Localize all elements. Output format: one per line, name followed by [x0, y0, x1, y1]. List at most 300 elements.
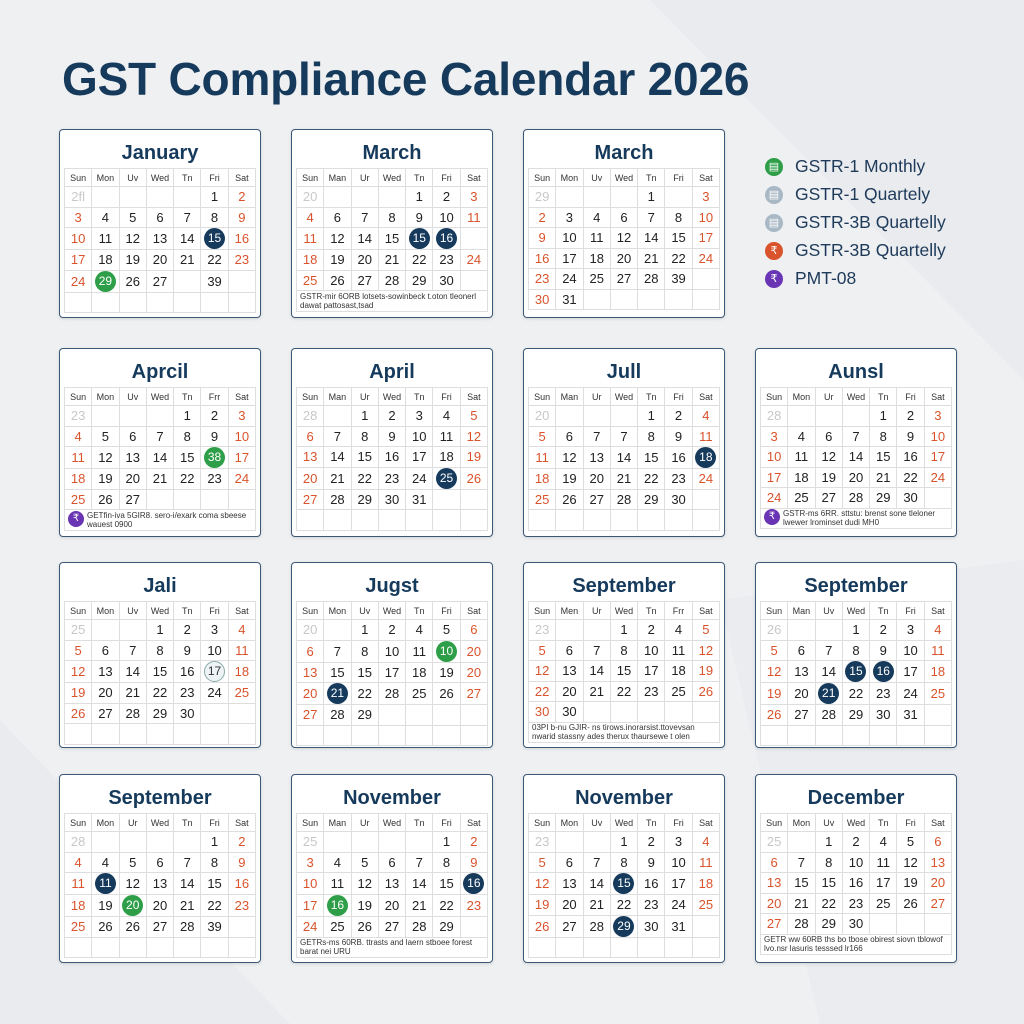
calendar: December: 25 — [767, 834, 781, 849]
calendar: Aprcil: ₹ — [73, 513, 79, 524]
calendar: September 2: Sat — [931, 606, 945, 616]
calendar: April: 4 — [443, 408, 450, 423]
calendar: Jali: 22 — [153, 685, 167, 700]
calendar: Jali: 23 — [180, 685, 194, 700]
calendar: Aunsl: 14 — [849, 449, 863, 464]
calendar: January: 4 — [102, 210, 109, 225]
calendar: Jull: 11 — [699, 429, 713, 444]
calendar: January: 24 — [71, 274, 85, 288]
calendar: Jugst: 1 — [361, 622, 368, 637]
calendar: Jull: 23 — [671, 471, 686, 486]
calendar: January: 2fl — [71, 189, 85, 204]
calendar: September: Sat — [699, 606, 713, 616]
calendar: March: Fri — [441, 172, 452, 182]
calendar: September: 8 — [620, 643, 628, 658]
calendar: Jugst: 6 — [307, 644, 314, 658]
calendar: Jugst: 5 — [443, 622, 450, 637]
calendar: Jali: Tn — [182, 606, 193, 616]
calendar: March: 9 — [416, 210, 423, 225]
calendar: Jali: 21 — [125, 685, 140, 700]
calendar: Aunsl: 10 — [931, 429, 945, 444]
calendar: December: 26 — [903, 896, 918, 911]
calendar: Jull: 8 — [648, 429, 655, 444]
calendar: Jugst: Fri — [441, 606, 452, 616]
calendar: September 3: 8 — [211, 855, 218, 870]
calendar: March: 8 — [388, 210, 396, 225]
calendar: November 2: November — [575, 787, 673, 809]
calendar: September 2: 7 — [825, 643, 832, 658]
calendar: March 2: 3 — [566, 210, 573, 225]
calendar: September 2: 26 — [767, 622, 781, 637]
calendar: Aunsl: 17 — [931, 449, 945, 464]
calendar: September: 26 — [699, 684, 713, 699]
calendar: April: 12 — [467, 429, 481, 444]
calendar: Aprcil: 20 — [125, 471, 140, 486]
calendar: March: Wed — [383, 172, 401, 182]
calendar: March: 19 — [330, 252, 345, 267]
calendar: November: 9 — [470, 855, 477, 870]
calendar: Jull: Sun — [534, 392, 550, 402]
calendar: Jali: 2 — [184, 622, 191, 637]
calendar: Jull: 29 — [644, 492, 658, 507]
calendar: January: 20 — [153, 252, 167, 267]
calendar: April: 26 — [467, 470, 481, 486]
calendar: Jugst: 7 — [334, 644, 341, 658]
calendar: November 2: 1 — [620, 834, 628, 849]
calendar: April: 15 — [357, 449, 372, 464]
calendar: September: 23 — [535, 622, 549, 637]
calendar: December: 21 — [794, 896, 809, 911]
calendar: September: 15 — [617, 663, 631, 678]
calendar: December: 25 — [876, 896, 890, 911]
calendar: January: 3 — [75, 210, 82, 225]
calendar: Aunsl: 17 — [767, 470, 781, 485]
calendar: Jull: 18 — [699, 450, 713, 464]
calendar: September 3: 2 — [238, 834, 245, 849]
calendar: Jugst: 15 — [357, 665, 372, 680]
calendar: December: 27 — [931, 896, 945, 911]
calendar: Jull: 7 — [593, 429, 600, 444]
calendar: September 2: 20 — [794, 686, 809, 701]
calendar: November 2: Sat — [699, 818, 713, 828]
calendar: November 2: Uv — [591, 818, 602, 828]
calendar: April: 19 — [467, 449, 481, 464]
calendar: March 2: 24 — [562, 271, 577, 286]
calendar: Jugst: 20 — [467, 665, 481, 680]
calendar: Jali: Wed — [151, 606, 169, 616]
calendar: Jull: 26 — [562, 492, 577, 507]
calendar: September 3: September — [108, 787, 212, 809]
calendar: September 2: 6 — [798, 643, 805, 658]
calendar: September: 30 — [535, 704, 549, 719]
calendar: Jull: 13 — [589, 450, 604, 465]
calendar: Aunsl: Tn — [878, 392, 889, 402]
calendar: Jali: 6 — [102, 643, 109, 658]
calendar: September 3: 16 — [235, 876, 249, 891]
calendar: September 3: 7 — [184, 855, 191, 870]
calendar: September 3: 23 — [235, 898, 249, 913]
calendar: Aunsl: 24 — [931, 470, 945, 485]
calendar: November 2: 26 — [535, 918, 549, 934]
calendar: November: 29 — [439, 919, 454, 934]
calendar: December: 23 — [849, 896, 863, 911]
calendar: September 2: 28 — [821, 707, 836, 722]
calendar: November 2: 5 — [539, 855, 546, 870]
calendar: December — [755, 774, 957, 963]
calendar: Jali: 5 — [75, 643, 82, 658]
calendar: September 3: 11 — [99, 876, 112, 890]
calendar: September 2: 15 — [849, 664, 863, 678]
calendar: September: 12 — [699, 643, 713, 658]
calendar: April: 16 — [385, 449, 399, 464]
calendar: March 2: Uv — [591, 172, 602, 182]
calendar: Jull: 11 — [535, 450, 549, 465]
calendar: Aprcil: 5 — [102, 429, 109, 444]
calendar: Jali: 20 — [98, 685, 113, 700]
calendar: September 2: Sun — [766, 606, 782, 616]
calendar: December: 13 — [931, 855, 945, 870]
calendar: November: 1 — [443, 834, 450, 849]
calendar: March: 12 — [330, 231, 345, 246]
calendar: November 2: 16 — [644, 876, 658, 891]
calendar: November: 2 — [470, 834, 477, 849]
calendar: Jull: 9 — [675, 429, 682, 444]
calendar: Jugst: Mon — [329, 606, 346, 616]
calendar: March 2: 29 — [535, 189, 549, 204]
calendar: Jali: 25 — [235, 685, 249, 700]
calendar: November 2: 2 — [648, 834, 655, 849]
calendar: September 2: Fri — [905, 606, 916, 616]
calendar: September 2: 27 — [794, 707, 809, 722]
calendar: November 2: 9 — [648, 855, 655, 870]
calendar: Aunsl: 28 — [849, 490, 863, 505]
calendar: Jugst: Sat — [467, 606, 481, 616]
calendar: Aunsl: Fri — [905, 392, 916, 402]
calendar: September 2: 5 — [771, 643, 778, 658]
calendar: Jugst: Jugst — [365, 575, 419, 597]
calendar: March: GSTR-mir 6ORB lotsets-sowinbeck t.oton tleonerl dawat pattosast,tsad — [300, 292, 476, 310]
calendar: April: Tn — [414, 392, 425, 402]
calendar: Aprcil: 6 — [129, 429, 136, 444]
calendar: Jali: 26 — [71, 706, 85, 721]
calendar: March 2: 1 — [648, 189, 655, 204]
calendar: December: GETR ww 60RB ths bo tbose obirest siovn tblowof lvo.nsr lasuris tesssed lr166 — [764, 935, 943, 953]
calendar: April: 30 — [385, 492, 399, 507]
calendar: Jali: 13 — [98, 664, 113, 679]
calendar: December: 2 — [852, 834, 860, 849]
calendar: Jali: 10 — [207, 643, 222, 658]
calendar: September: 25 — [671, 684, 686, 699]
calendar: April: 10 — [412, 429, 426, 444]
legend: GSTR-1 Monthly: GSTR-1 Monthly — [795, 156, 925, 176]
calendar: Jull: 7 — [620, 429, 628, 444]
calendar: September 3: 5 — [129, 855, 136, 870]
calendar: November 2: 19 — [535, 897, 549, 912]
calendar: Jugst: Wed — [383, 606, 401, 616]
calendar: Jull — [523, 348, 725, 537]
calendar: March: 3 — [470, 189, 477, 204]
legend — [765, 156, 946, 288]
calendar: March: 11 — [467, 210, 481, 225]
calendar: November 2: 25 — [699, 897, 713, 912]
calendar: Aprcil: 14 — [153, 450, 167, 465]
calendar: September — [523, 562, 725, 748]
calendar: September 3: Mon — [97, 818, 114, 828]
calendar: April: 14 — [330, 449, 345, 464]
calendar: Jugst: 15 — [330, 665, 345, 680]
calendar: September 2: 19 — [767, 686, 781, 701]
calendar: April: Ur — [360, 392, 369, 402]
calendar: April — [291, 348, 493, 537]
calendar: December: 15 — [821, 875, 836, 890]
calendar: Aprcil: Tn — [182, 392, 193, 402]
calendar: September 2: 13 — [794, 664, 809, 679]
calendar: January: 5 — [129, 210, 136, 225]
calendar: September 3: Sat — [235, 818, 249, 828]
calendar: December: Fri — [905, 818, 916, 828]
calendar: Jugst: 22 — [357, 686, 372, 701]
calendar: September 3 — [59, 774, 261, 963]
calendar: Aprcil: Sun — [70, 392, 86, 402]
calendar: November 2: 27 — [562, 918, 577, 934]
calendar: March: Sat — [467, 172, 481, 182]
calendar: Jull: 2 — [675, 408, 682, 423]
calendar: November 2: Sun — [534, 818, 550, 828]
calendar: September: 30 — [562, 704, 577, 719]
calendar: Aunsl: 16 — [903, 449, 918, 464]
calendar: March 2: 12 — [617, 230, 631, 245]
calendar: September: 10 — [644, 643, 658, 658]
calendar: March: March — [363, 142, 421, 164]
calendar: Jull: Jull — [607, 361, 641, 383]
calendar: November: Sat — [467, 818, 481, 828]
calendar: Jali: Sun — [70, 606, 86, 616]
calendar: September: Ur — [592, 606, 601, 616]
calendar: September 3: 9 — [238, 855, 245, 870]
calendar: March: Tn — [414, 172, 425, 182]
calendar: Aprcil: 23 — [207, 471, 222, 486]
calendar: Aprcil: 22 — [180, 471, 194, 486]
calendar: September 3: 12 — [125, 876, 140, 891]
calendar: Jali: 25 — [71, 622, 85, 637]
calendar: Jull: 20 — [535, 408, 549, 423]
calendar: January: 27 — [153, 274, 167, 288]
calendar: September 3: 18 — [71, 898, 85, 913]
calendar: December: 5 — [907, 834, 914, 849]
calendar: Jugst: 11 — [413, 644, 426, 658]
calendar: Jali: Sat — [235, 606, 249, 616]
calendar: November: 7 — [416, 855, 423, 870]
calendar: November 2: Tn — [646, 818, 657, 828]
calendar: September: 5 — [539, 643, 546, 658]
calendar: March 2: Wed — [615, 172, 633, 182]
calendar: April: 25 — [440, 470, 453, 484]
calendar: Aprcil: Mon — [97, 392, 114, 402]
legend: PMT-08 — [765, 268, 856, 288]
calendar: September: Frr — [673, 606, 684, 616]
calendar: Jull: Tn — [646, 392, 657, 402]
calendar: Jull: 22 — [644, 471, 658, 486]
calendar: Aprcil: 17 — [235, 450, 249, 465]
calendar: March 2: 2 — [539, 210, 546, 225]
calendar: Aprcil: 7 — [156, 429, 164, 444]
calendar: November: 21 — [412, 898, 426, 913]
calendar: December: 15 — [794, 875, 809, 890]
calendar: April: 27 — [303, 492, 317, 507]
calendar: November: Tn — [414, 818, 425, 828]
calendar: Aunsl: 4 — [798, 429, 805, 444]
calendar: Jali: 8 — [156, 643, 164, 658]
legend: GSTR-1 Monthly: ▤ — [769, 161, 779, 173]
calendar: Jali: 1 — [156, 622, 164, 637]
calendar: Jali: 19 — [71, 685, 85, 700]
calendar: January: Wed — [151, 172, 169, 182]
calendar: September 3: 4 — [102, 855, 109, 870]
calendar: December: Tn — [878, 818, 889, 828]
calendar: September 3: 26 — [125, 919, 140, 934]
calendar: Aprcil: Wed — [151, 392, 169, 402]
calendar: Aunsl: 25 — [794, 490, 809, 505]
calendar: April: 21 — [330, 470, 345, 486]
calendar: April: 28 — [303, 408, 317, 423]
calendar: Jugst: 27 — [467, 686, 481, 701]
calendar: November: 28 — [412, 919, 426, 934]
calendar: January: 19 — [125, 252, 140, 267]
calendar: Jali: 27 — [98, 706, 113, 721]
calendar: December: 16 — [849, 875, 863, 890]
calendar: November: Man — [329, 818, 346, 828]
calendar: November: 27 — [385, 919, 399, 934]
calendar: September 3: Tn — [182, 818, 193, 828]
calendar: Aunsl: Ur — [824, 392, 833, 402]
calendar: September: 22 — [617, 684, 631, 699]
calendar: November: 15 — [439, 876, 454, 891]
calendar: December: Uv — [823, 818, 834, 828]
calendar: January: 8 — [211, 210, 218, 225]
calendar: Aunsl: 3 — [771, 429, 778, 444]
calendar: September 2: 17 — [903, 664, 918, 679]
calendar: September: 03PI b-nu GJIR- ns tirows.inorarsist.ttovevsan nwarid stassny ades therux thaursewe t olen — [532, 723, 695, 741]
calendar: March 2: March — [595, 142, 653, 164]
calendar: Aprcil: 26 — [98, 492, 113, 507]
calendar: January: 39 — [207, 274, 222, 288]
calendar: November: Ur — [360, 818, 369, 828]
calendar: Aprcil: Frr — [209, 392, 220, 402]
calendar: November 2: 20 — [562, 897, 577, 912]
calendar: March 2: 10 — [699, 210, 713, 225]
calendar: September 3: Sun — [70, 818, 86, 828]
title: GST Compliance Calendar 2026 — [62, 53, 749, 105]
calendar: Aprcil: 25 — [71, 492, 85, 507]
calendar: November 2: 17 — [671, 876, 686, 891]
calendar: Jugst: 6 — [470, 622, 477, 637]
calendar: December: 6 — [771, 855, 778, 870]
calendar: Jull: 16 — [671, 450, 686, 465]
calendar: March 2: 15 — [671, 230, 686, 245]
calendar: September: Tn — [646, 606, 657, 616]
calendar: Jugst: 10 — [440, 644, 453, 658]
calendar: September 3: 28 — [71, 834, 85, 849]
calendar: November: 22 — [439, 898, 454, 913]
calendar: November: 3 — [307, 855, 314, 870]
calendar: Aunsl: Wed — [847, 392, 865, 402]
calendar: Aprcil: GETfin-iva 5GIR8. sero-i/exark coma sbeese wauest 0900 — [87, 511, 246, 529]
calendar: Aprcil: Uv — [127, 392, 138, 402]
calendar: January: 16 — [235, 231, 249, 246]
calendar: Jali: 29 — [153, 706, 167, 721]
calendar: Aprcil: 11 — [71, 450, 85, 465]
calendar: September: 6 — [566, 643, 573, 658]
calendar: September 2: September — [804, 575, 908, 597]
legend: GSTR-1 Quarterly: GSTR-1 Quartely — [795, 184, 930, 204]
calendar: January: 1 — [211, 189, 218, 204]
calendar: January: 6 — [156, 210, 164, 225]
calendar: September 3: 20 — [126, 898, 139, 912]
calendar: September 3: 15 — [207, 876, 222, 891]
calendar: March: 14 — [357, 231, 372, 246]
calendar: January: 29 — [99, 274, 112, 288]
calendar: September 2: 24 — [903, 686, 918, 701]
calendar: September: 12 — [535, 663, 549, 678]
calendar: September 3: 27 — [153, 919, 167, 934]
calendar: March 2: Tn — [646, 172, 657, 182]
calendar: Aprcil: 3 — [238, 408, 245, 423]
calendar: September: 11 — [672, 643, 685, 658]
calendar: March 2: 23 — [535, 271, 549, 286]
calendar: September: 13 — [562, 663, 577, 678]
calendar: Aprcil — [59, 348, 261, 537]
calendar: September 2: 2 — [880, 622, 887, 637]
calendar: September 3: 26 — [98, 919, 113, 934]
calendar: September 2: Uv — [823, 606, 834, 616]
calendar: Jali: 4 — [238, 622, 245, 637]
calendar: Aunsl: 3 — [934, 408, 941, 423]
calendar: September: 5 — [702, 622, 709, 637]
calendar: March 2: 28 — [644, 271, 658, 286]
calendar: January: 22 — [207, 252, 222, 267]
legend: PMT-08: ₹ — [770, 273, 778, 285]
calendar: March 2: 22 — [671, 251, 686, 266]
calendar: Jugst: 28 — [330, 707, 345, 722]
calendar: March: 2 — [443, 189, 450, 204]
calendar: Jull: 30 — [671, 492, 686, 507]
calendar: Jugst: 29 — [357, 707, 372, 722]
calendar: Aunsl — [755, 348, 957, 537]
calendar: April: 11 — [440, 429, 453, 444]
calendar: September 3: Ur — [128, 818, 137, 828]
calendar: September 3: 25 — [71, 919, 85, 934]
calendar: January: 7 — [184, 210, 191, 225]
calendar: March: 15 — [413, 231, 426, 245]
calendar: March: 25 — [303, 273, 317, 288]
calendar: September: 2 — [648, 622, 655, 637]
calendar: January: Tn — [182, 172, 193, 182]
calendar: September 3: 4 — [75, 855, 82, 870]
calendar: September 2: Tn — [878, 606, 889, 616]
calendar: Jugst: 8 — [361, 644, 368, 658]
calendar: Jull: 21 — [617, 471, 631, 486]
calendar: December: 27 — [767, 916, 781, 931]
calendar: Aunsl: GSTR-ms 6RR. sttstu: brenst sone tleloner lwewer lrominset dudi MH0 — [783, 509, 935, 527]
calendar: April: 8 — [361, 429, 368, 444]
calendar: Jali: 14 — [125, 664, 140, 679]
calendar: Jali: 15 — [153, 664, 167, 679]
calendar: Aprcil: Sat — [235, 392, 249, 402]
calendar: November: 23 — [467, 898, 481, 913]
calendar: March: 28 — [385, 273, 399, 288]
calendar: September 3: 22 — [207, 898, 222, 913]
calendar: Jugst: Sun — [302, 606, 318, 616]
